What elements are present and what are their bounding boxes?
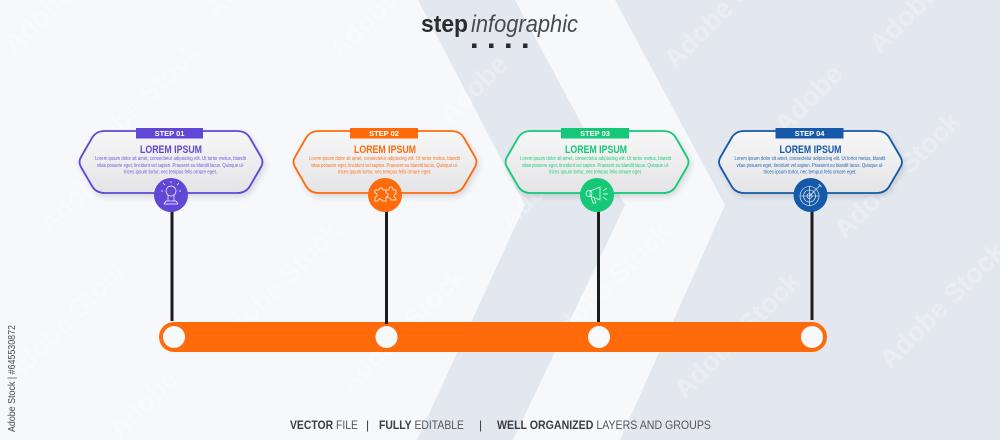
body text: Lorem ipsum dolor sit amet, consectetur adipiscing elit. Ut tortor metus, blandit [734, 156, 886, 162]
watermarks: Adobe [493, 154, 574, 234]
heading: LOREM IPSUM [780, 144, 842, 156]
body text: vitae posuere eget, tincidunt vel sapien. Praesent eu blandit lacus. Quisque ul- [97, 163, 244, 169]
watermarks: Adobe Stock [0, 251, 137, 389]
body text: vitae posuere eget, tincidunt vel sapien. Praesent eu blandit lacus. Quisque ul- [311, 163, 458, 169]
title [421, 11, 578, 38]
body text: trices ipsum tortor, nec tempus felis ornare eget. [124, 170, 217, 176]
watermarks: Adobe [433, 49, 514, 129]
background chevron right [615, 0, 1000, 440]
body text: Lorem ipsum dolor sit amet, consectetur adipiscing elit. Ut tortor metus, blandit [309, 156, 460, 162]
footer text: WELL ORGANIZED LAYERS AND GROUPS [497, 418, 711, 432]
step tab: STEP 02 [369, 129, 399, 138]
icon: megaphone [580, 178, 614, 212]
background chevron left [417, 0, 625, 440]
step tab [561, 128, 629, 138]
body text: vitae posuere eget, tincidunt vel sapien. Praesent eu blandit lacus. Quisque ul- [522, 163, 669, 169]
footer text: | [479, 418, 482, 432]
icon: target [794, 178, 828, 212]
watermarks: Adobe Stock [333, 261, 472, 399]
body text [734, 156, 886, 176]
timeline bar [159, 322, 827, 352]
body text [309, 156, 460, 176]
body text: trices ipsum tortor, nec tempus felis ornare eget. [764, 170, 856, 176]
body text: trices ipsum tortor, nec tempus felis ornare eget. [338, 170, 431, 176]
connector lines [170, 205, 814, 324]
watermarks: Adobe [33, 159, 114, 239]
icon: puzzle [368, 178, 402, 212]
watermarks: Adobe Stock [828, 106, 967, 244]
panel: step 03 [506, 128, 688, 212]
footer text: VECTOR FILE [290, 418, 358, 432]
footer text: FULLY EDITABLE [379, 418, 464, 432]
card outline [80, 131, 262, 193]
heading: LOREM IPSUM [565, 144, 627, 156]
title: infographic [471, 11, 578, 38]
card outline [506, 131, 688, 193]
watermarks: Adobe Stock [668, 266, 807, 404]
step tab: STEP 01 [155, 129, 184, 138]
heading: LOREM IPSUM [140, 144, 202, 156]
step tab [350, 128, 418, 138]
panel: step 02 [294, 128, 476, 212]
panel: step 01 [80, 128, 262, 212]
step tab [776, 128, 844, 138]
watermarks: Adobe Stock [538, 216, 677, 354]
title: step [421, 11, 468, 38]
body text [95, 156, 246, 176]
title dots [472, 44, 528, 48]
stock id label: Adobe Stock | #645530872 [6, 325, 18, 432]
step tab [136, 128, 203, 138]
body text: Lorem ipsum dolor sit amet, consectetur adipiscing elit. Ut tortor metus, blandit [95, 156, 246, 162]
step tab: STEP 03 [580, 129, 610, 138]
body text: vitae posuere eget, tincidunt vel sapien. Praesent eu blandit lacus. Quisque ul- [736, 163, 884, 169]
footer text [290, 418, 711, 432]
footer text: | [366, 418, 369, 432]
step tab: STEP 04 [795, 129, 825, 138]
watermarks: Adobe [768, 59, 849, 139]
icon: light bulb [154, 178, 188, 212]
body text: Lorem ipsum dolor sit amet, consectetur adipiscing elit. Ut tortor metus, blandit [520, 156, 671, 162]
card outline [294, 131, 476, 193]
watermarks: Adobe Stock [68, 36, 207, 174]
panel: step 04 [719, 128, 902, 212]
heading: LOREM IPSUM [354, 144, 416, 156]
watermarks: Adobe Stock [208, 216, 347, 354]
card outline [719, 131, 902, 193]
body text [520, 156, 671, 176]
body text: trices ipsum tortor, nec tempus felis ornare eget. [549, 170, 642, 176]
